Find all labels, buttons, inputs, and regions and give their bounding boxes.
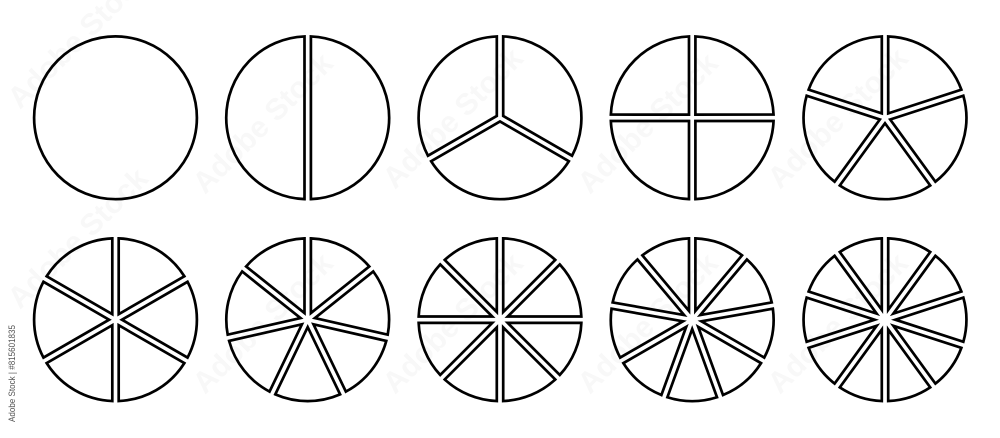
side credit text: Adobe Stock | #815601835 — [7, 325, 17, 422]
watermark: faint repeated stock text: Adobe Stock — [377, 42, 530, 195]
pie: 3 sectors — [395, 17, 605, 199]
pie: 2 sectors — [226, 36, 389, 199]
pie: 6 sectors — [34, 230, 197, 409]
pie: 8 sectors — [414, 234, 586, 406]
watermark: faint repeated stock text: Adobe Stock — [572, 47, 725, 200]
watermark: faint repeated stock text: Adobe Stock — [2, 162, 155, 315]
pie: 9 sectors — [608, 235, 777, 401]
pie: 10 sectors — [804, 235, 966, 404]
pie: 5 sectors — [794, 25, 976, 199]
watermark: faint repeated stock text: Adobe Stock — [187, 247, 340, 400]
watermark: faint repeated stock text: Adobe Stock — [762, 42, 915, 195]
watermark: faint repeated stock text: Adobe Stock — [377, 247, 530, 400]
pie: 4 sectors — [596, 21, 789, 214]
watermark: faint repeated stock text: Adobe Stock — [572, 247, 725, 400]
watermark: faint repeated stock text: Adobe Stock — [762, 247, 915, 400]
pie: whole circle — [34, 36, 197, 199]
watermark: faint repeated stock text: Adobe Stock — [187, 47, 340, 200]
pie: 7 sectors — [221, 232, 394, 401]
